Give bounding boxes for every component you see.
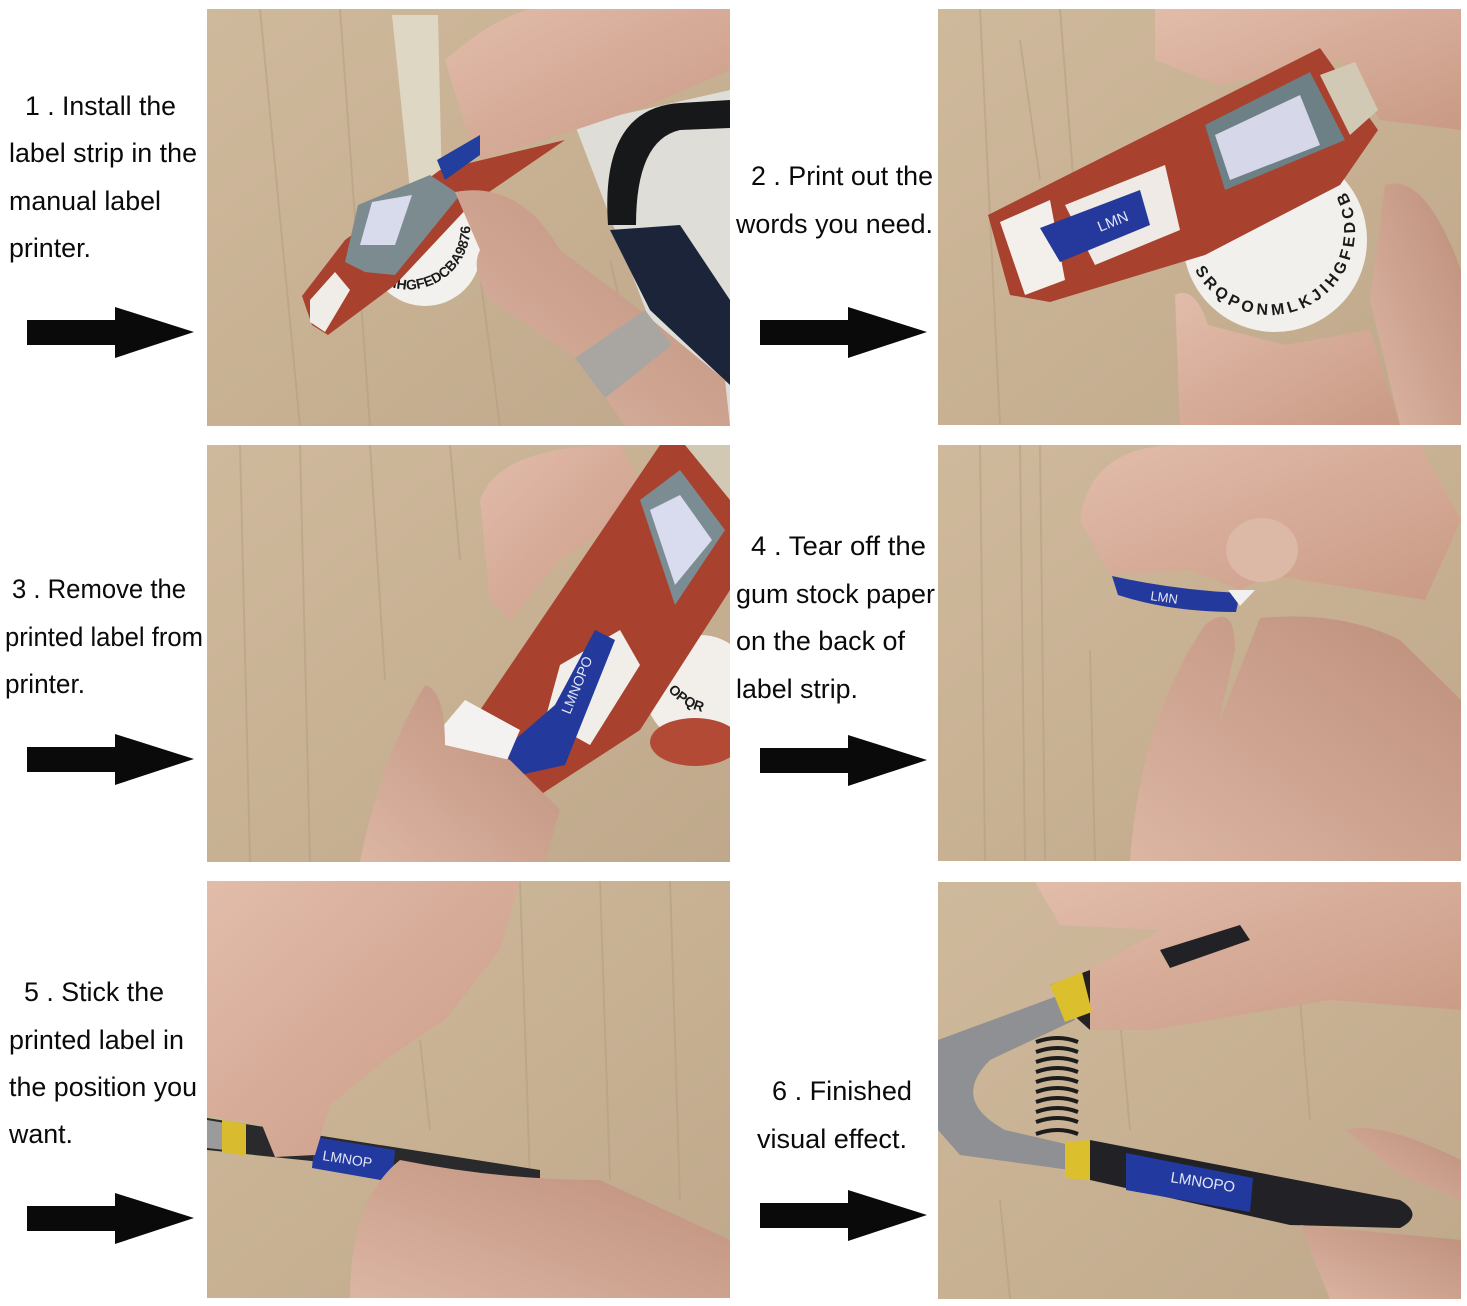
panel: step 6 text: 6 . Finished [772, 1076, 912, 1106]
dial letters: SRQPONMLKJIHGFEDCB [1196, 193, 1356, 316]
panel: step 5 text: want. [8, 1119, 73, 1149]
panel: step 3 photo: LMNOPO [558, 654, 596, 716]
panel: step 6 photo [938, 882, 1461, 1299]
panel: step 1 photo [207, 9, 730, 426]
arrow: step 1 [27, 307, 194, 358]
panel: step 1 text [9, 91, 197, 263]
panel: step 2 text [735, 161, 933, 239]
panel: step 5 text: 5 . Stick the [24, 977, 164, 1007]
panel: step 3 photo [207, 445, 730, 862]
panel: step 4 photo: LMN [1150, 588, 1179, 607]
arrow: step 2 [760, 307, 927, 358]
panel: step 4 photo [938, 445, 1461, 861]
panel: step 1 text: 1 . Install the [25, 91, 176, 121]
panel: step 3 text: printed label from [5, 622, 203, 652]
panel: step 6 text [757, 1076, 912, 1154]
panel: step 3 text: printer. [5, 669, 85, 699]
panel: step 2 text: 2 . Print out the [751, 161, 933, 191]
panel: step 1 text: label strip in the [9, 138, 197, 168]
arrow: step 4 [760, 735, 927, 786]
panel: step 2 photo: LMN [1095, 208, 1131, 236]
panel: step 1 text: printer. [9, 233, 91, 263]
panel: step 6 photo: LMNOPO [1169, 1169, 1236, 1196]
panel: step 4 text [736, 531, 935, 704]
panel: step 4 text: 4 . Tear off the [751, 531, 926, 561]
panel: step 5 text: printed label in [9, 1025, 184, 1055]
panel: step 6 text: visual effect. [757, 1124, 907, 1154]
panel: step 2 photo [938, 9, 1461, 425]
panel: step 5 text [8, 977, 197, 1149]
panel: step 5 text: the position you [9, 1072, 197, 1102]
arrow: step 6 [760, 1190, 927, 1241]
panel: step 5 photo: LMNOP [322, 1147, 373, 1171]
panel: step 5 photo [207, 881, 730, 1298]
panel: step 3 text: 3 . Remove the [12, 574, 186, 604]
panel: step 3 text [5, 574, 203, 699]
panel: step 1 text: manual label [9, 186, 161, 216]
panel: step 4 text: gum stock paper [736, 579, 935, 609]
arrow: step 5 [27, 1193, 194, 1244]
dial letters: OPQR [670, 686, 704, 712]
arrow: step 3 [27, 734, 194, 785]
panel: step 2 text: words you need. [735, 209, 933, 239]
panel: step 4 text: on the back of [736, 626, 906, 656]
dial letters: JIHGFEDCBA9876 [393, 226, 470, 290]
panel: step 4 text: label strip. [736, 674, 858, 704]
